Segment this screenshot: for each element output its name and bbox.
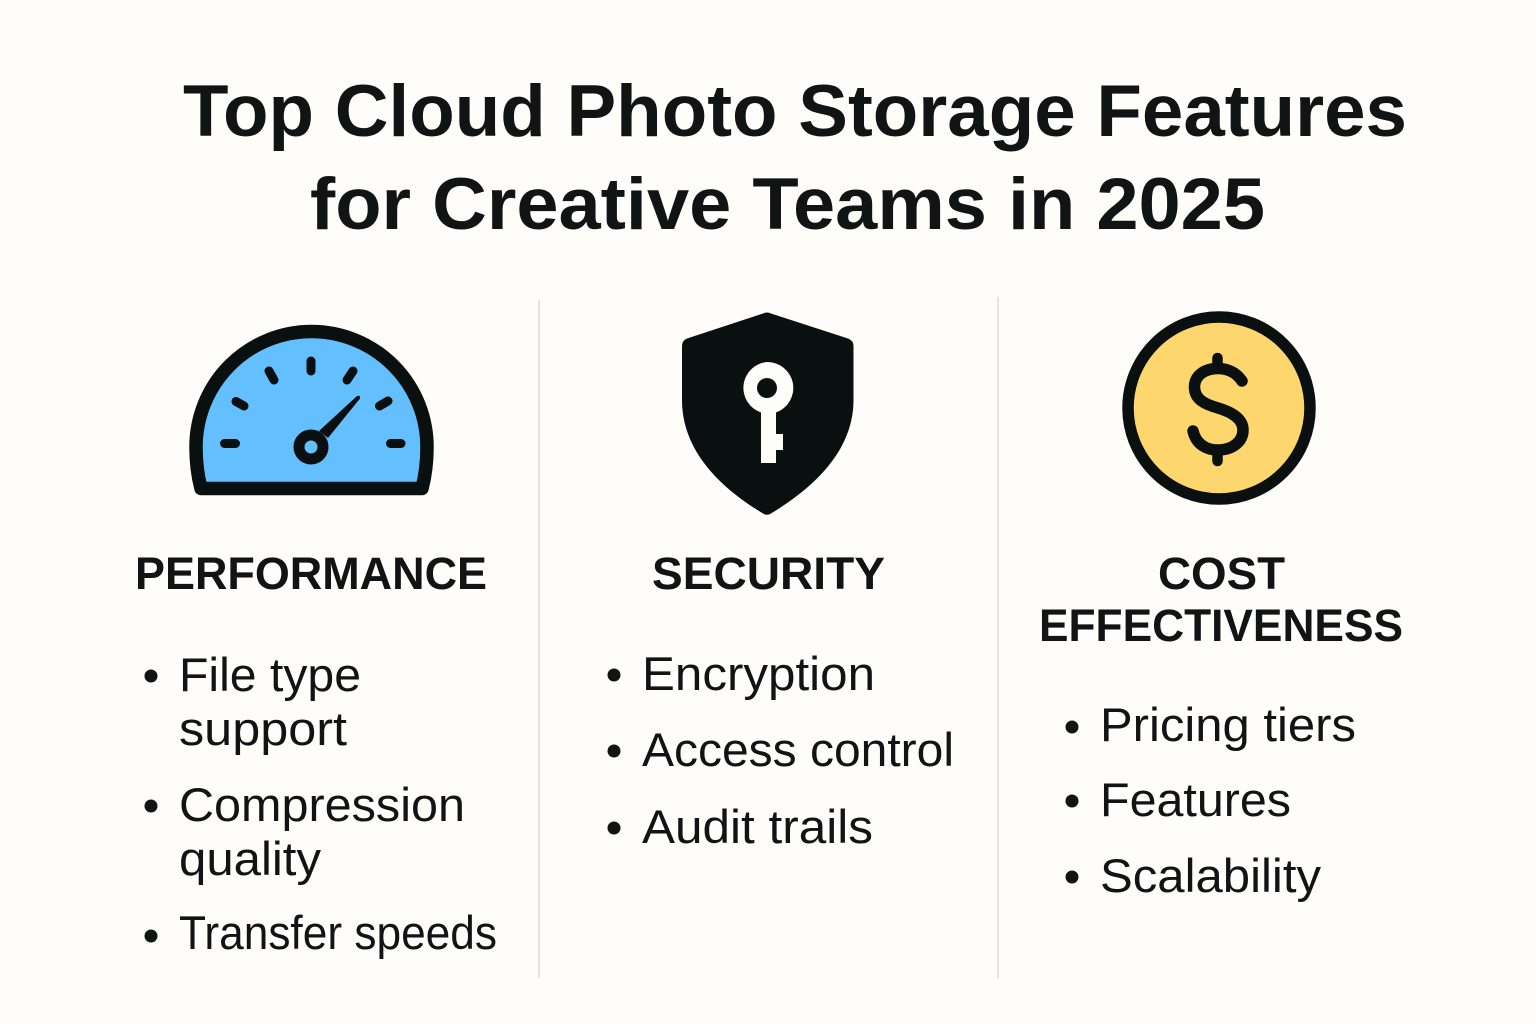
title: for Creative Teams in 2025 [310,164,1265,245]
list: cost items [1066,698,1356,902]
list: performance items: quality [179,832,322,885]
list: performance items: File type [179,648,361,701]
heading: cost effectiveness: EFFECTIVENESS [1039,600,1403,651]
heading: cost effectiveness: COST [1158,548,1285,599]
list: security items: Encryption [642,647,875,700]
list: security items: Access control [642,723,954,776]
list: performance items: Transfer speeds [179,906,497,959]
title [183,71,1407,245]
list: security items: Audit trails [642,800,873,853]
list: cost items: Scalability [1100,849,1322,902]
panel: performance [135,332,497,959]
list: security items [608,647,954,853]
icon: shield with key [682,312,854,515]
heading: security: SECURITY [652,548,885,599]
list: performance items: Compression [179,778,465,831]
list: performance items: support [179,702,347,755]
heading: cost effectiveness [1039,548,1403,651]
list: performance items [144,648,497,959]
icon: dollar coin [1128,317,1310,499]
icon: speedometer gauge [196,332,427,488]
panel: cost effectiveness [1039,317,1403,902]
list: cost items: Pricing tiers [1100,698,1356,751]
title: Top Cloud Photo Storage Features [183,71,1407,152]
heading: performance: PERFORMANCE [135,548,487,599]
panel: security [608,312,954,853]
list: cost items: Features [1100,773,1291,826]
